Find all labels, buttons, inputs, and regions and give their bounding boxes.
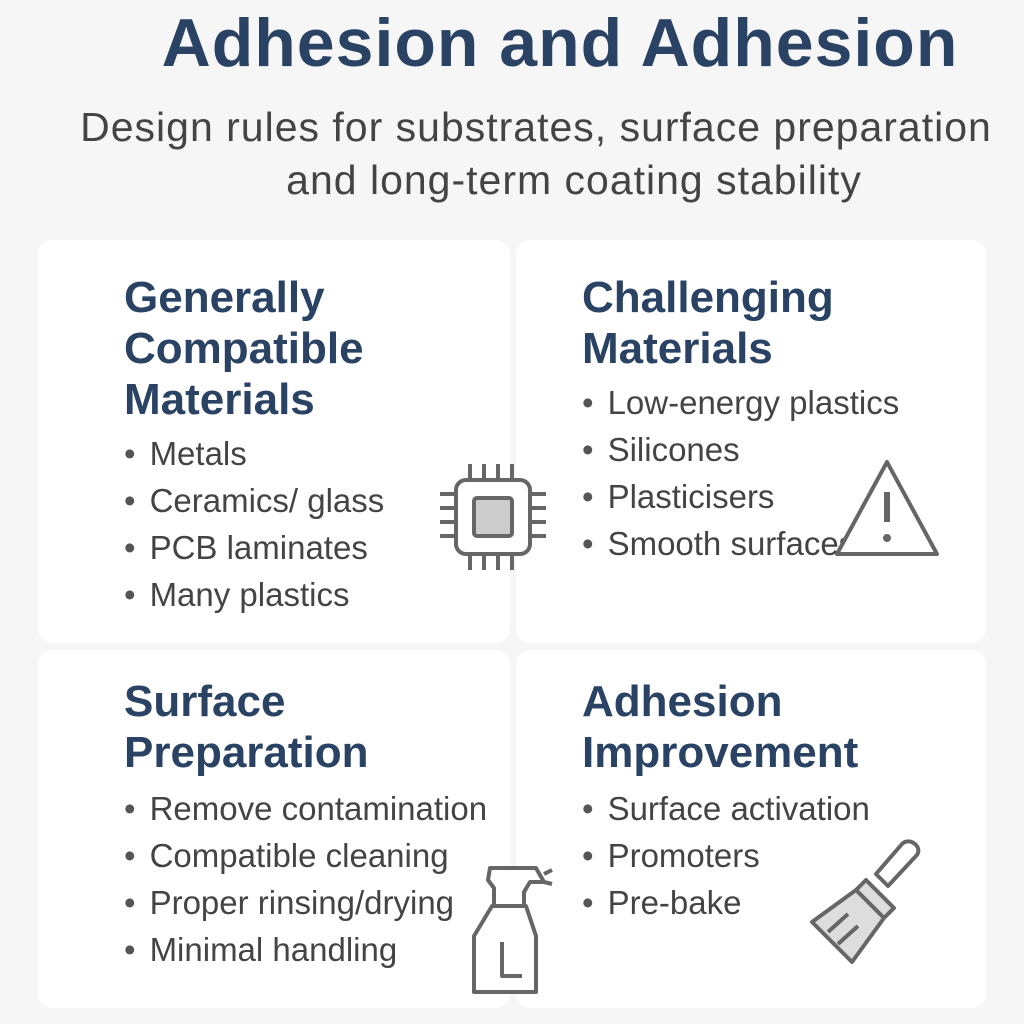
bullet list: Ceramics/ glass <box>150 482 384 519</box>
heading <box>582 273 834 373</box>
panel: adhesion improvement <box>516 650 986 1008</box>
bullet list: Metals <box>150 435 247 472</box>
subtitle: Design rules for substrates, surface preparation <box>80 104 992 150</box>
bullet list: Many plastics <box>150 576 349 613</box>
bullet list <box>125 790 487 968</box>
subtitle <box>80 104 992 203</box>
heading <box>124 677 369 777</box>
bullet list <box>583 790 870 921</box>
heading: Adhesion <box>582 677 782 726</box>
bullet list: Smooth surfaces <box>608 525 855 562</box>
panel: compatible <box>38 240 510 643</box>
bullet list <box>583 384 899 562</box>
bullet list: Silicones <box>608 431 740 468</box>
heading: Compatible <box>124 324 364 373</box>
heading: Improvement <box>582 728 858 777</box>
heading: Challenging <box>582 273 834 322</box>
bullet list: Promoters <box>608 837 760 874</box>
heading: Generally <box>124 273 325 322</box>
icon: chip <box>440 464 546 570</box>
bullet list: Remove contamination <box>150 790 487 827</box>
bullet list: Plasticisers <box>608 478 774 515</box>
panel: challenging <box>516 240 986 643</box>
bullet list: PCB laminates <box>150 529 368 566</box>
bullet list: Proper rinsing/drying <box>150 884 454 921</box>
icon: paint brush <box>810 839 920 964</box>
subtitle: and long-term coating stability <box>286 157 862 203</box>
title: Adhesion and Adhesion <box>162 5 958 81</box>
panel: surface preparation <box>38 650 510 1008</box>
heading: Preparation <box>124 728 369 777</box>
heading <box>582 677 858 777</box>
bullet list: Minimal handling <box>150 931 397 968</box>
bullet list: Low-energy plastics <box>608 384 899 421</box>
heading <box>124 273 364 424</box>
bullet list: Compatible cleaning <box>150 837 449 874</box>
heading: Surface <box>124 677 285 726</box>
bullet list: Surface activation <box>608 790 870 827</box>
heading: Materials <box>124 375 315 424</box>
icon: spray bottle <box>472 866 553 994</box>
icon: warning <box>835 460 940 556</box>
bullet list <box>125 435 384 613</box>
bullet list: Pre-bake <box>608 884 741 921</box>
heading: Materials <box>582 324 773 373</box>
